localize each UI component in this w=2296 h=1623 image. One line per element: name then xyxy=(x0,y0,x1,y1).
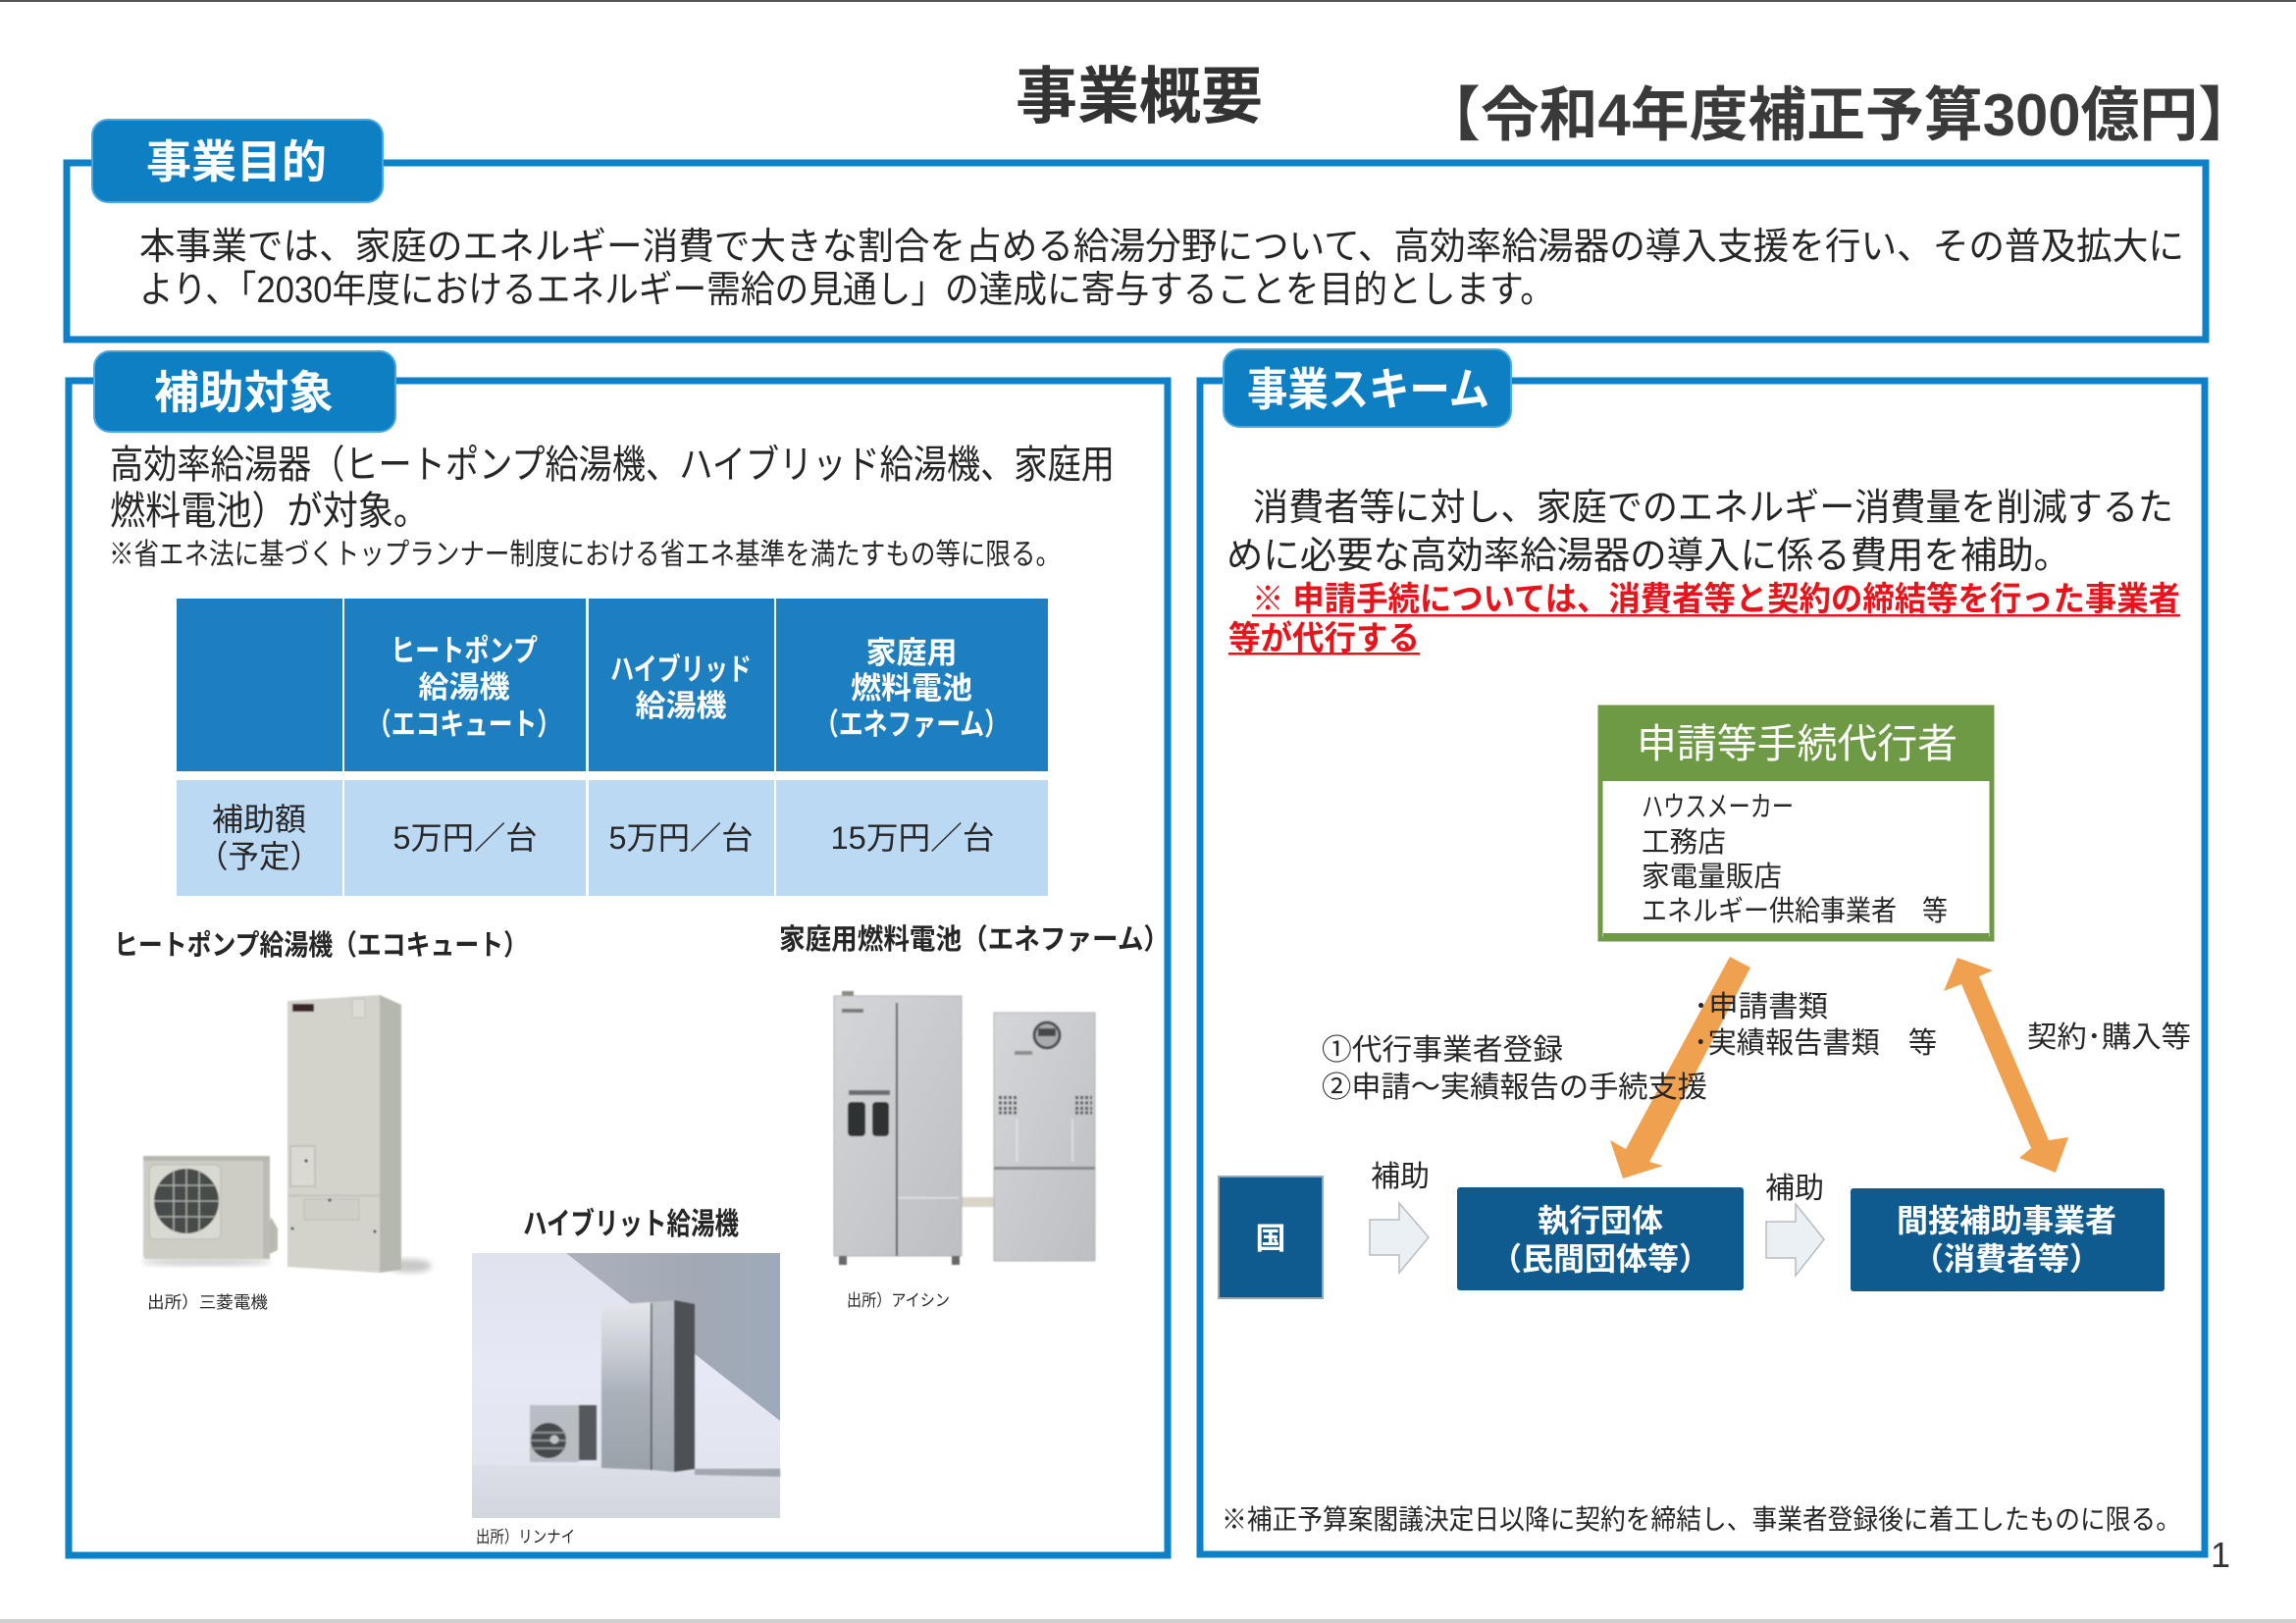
scan edge: bottom xyxy=(0,1619,2296,1623)
scheme text xyxy=(1226,488,2173,577)
panel: subsidy targets xyxy=(69,351,1170,1555)
hybrid label: ハイブリット給湯機 xyxy=(523,1207,739,1241)
subsidy label 2: 補助 xyxy=(1765,1173,1824,1205)
purpose text: 本事業では、家庭のエネルギー消費で大きな割合を占める給湯分野について、高効率給湯器の導入支援を行い、その普及拡大に xyxy=(139,227,2184,268)
table value row: 補助額 xyxy=(212,802,306,837)
box: executing body: （民間団体等） xyxy=(1490,1241,1710,1277)
caption: Aisin: 出所）アイシン xyxy=(847,1291,950,1310)
table header row: 家庭用 xyxy=(865,636,958,670)
box: indirect subsidy recipient xyxy=(1851,1188,2165,1291)
table header row: （エコキュート） xyxy=(367,707,561,742)
red note xyxy=(1228,581,2180,657)
box: indirect subsidy recipient: 間接補助事業者 xyxy=(1897,1203,2116,1238)
agent steps labels: ①代行事業者登録 xyxy=(1322,1034,1563,1067)
caption: Rinnai: 出所）リンナイ xyxy=(476,1528,575,1546)
application documents labels: ･実績報告書類 等 xyxy=(1694,1027,1937,1060)
scan edge: top xyxy=(0,0,2296,2)
agent box xyxy=(1598,706,1994,940)
red note: ※ 申請手続については、消費者等と契約の締結等を行った事業者 xyxy=(1252,581,2180,618)
photo: Rinnai hybrid water heater xyxy=(472,1253,780,1518)
arrow: agent to executing body xyxy=(1610,957,1750,1178)
agent box: 家電量販店 xyxy=(1642,861,1782,893)
box: executing body: 執行団体 xyxy=(1538,1203,1663,1238)
agent steps labels: ②申請～実績報告の手続支援 xyxy=(1322,1072,1707,1104)
photo: EcoCute heat pump water heater xyxy=(141,995,432,1273)
application documents labels xyxy=(1694,991,1937,1060)
contract label: 契約･購入等 xyxy=(2027,1021,2191,1054)
targets text: ※省エネ法に基づくトップランナー制度における省エネ基準を満たすもの等に限る。 xyxy=(109,539,1061,571)
table header row: （エネファーム） xyxy=(814,707,1009,742)
table header row: 給湯機 xyxy=(418,670,510,705)
arrow: subsidy 2 xyxy=(1766,1204,1824,1276)
photo: Aisin fuel cell unit xyxy=(834,991,1095,1265)
targets text: 燃料電池）が対象。 xyxy=(110,490,429,533)
panel: purpose xyxy=(67,120,2206,340)
scheme tab: 事業スキーム xyxy=(1247,364,1489,415)
subsidy table xyxy=(177,599,1048,896)
table header row: 給湯機 xyxy=(636,689,726,723)
targets tab: 補助対象 xyxy=(154,367,334,418)
footnote: ※補正予算案閣議決定日以降に契約を締結し、事業者登録後に着工したものに限る。 xyxy=(1222,1504,2181,1535)
scheme text: めに必要な高効率給湯器の導入に係る費用を補助。 xyxy=(1226,536,2070,577)
table header row: ヒートポンプ xyxy=(391,634,538,668)
agent box: エネルギー供給事業者 等 xyxy=(1642,895,1948,927)
arrow: subsidy 1 xyxy=(1370,1203,1429,1273)
table value row: （予定） xyxy=(197,839,321,874)
table value row: 15万円／台 xyxy=(830,820,995,856)
targets text: 高効率給湯器（ヒートポンプ給湯機、ハイブリッド給湯機、家庭用 xyxy=(110,444,1115,487)
box: executing body xyxy=(1457,1187,1744,1290)
page number: 1 xyxy=(2211,1535,2230,1575)
scheme tab xyxy=(1224,349,1511,427)
table value row: 5万円／台 xyxy=(608,820,754,856)
agent box: 申請等手続代行者 xyxy=(1637,721,1957,766)
purpose tab xyxy=(92,120,383,202)
scheme text: 消費者等に対し、家庭でのエネルギー消費量を削減するた xyxy=(1253,488,2173,529)
subsidy label 1: 補助 xyxy=(1371,1161,1430,1193)
box: indirect subsidy recipient: （消費者等） xyxy=(1912,1241,2101,1277)
table value row xyxy=(177,780,1048,896)
purpose text xyxy=(139,227,2184,311)
box: national government xyxy=(1219,1177,1323,1298)
purpose tab: 事業目的 xyxy=(146,136,327,187)
box: national government: 国 xyxy=(1256,1222,1285,1256)
heat pump label: ヒートポンプ給湯機（エコキュート） xyxy=(114,929,528,962)
title: 事業概要 xyxy=(1016,63,1263,131)
budget heading: 【令和4年度補正予算300億円】 xyxy=(1422,82,2257,148)
targets tab xyxy=(94,351,395,432)
agent box: 工務店 xyxy=(1642,826,1726,859)
table header row xyxy=(177,599,1048,771)
panel: project scheme xyxy=(1200,349,2205,1554)
agent box: ハウスメーカー xyxy=(1642,792,1794,823)
table value row: 5万円／台 xyxy=(392,820,538,856)
arrow: agent and consumer double-headed xyxy=(1944,958,2068,1173)
caption: Mitsubishi: 出所）三菱電機 xyxy=(147,1293,268,1312)
purpose text: より、「2030年度におけるエネルギー需給の見通し」の達成に寄与することを目的とします。 xyxy=(139,270,1554,311)
table header row: ハイブリッド xyxy=(610,653,752,687)
targets text xyxy=(109,444,1115,571)
red note: 等が代行する xyxy=(1228,619,1420,657)
application documents labels: ･申請書類 xyxy=(1694,991,1828,1023)
agent steps labels xyxy=(1322,1034,1707,1104)
table header row: 燃料電池 xyxy=(851,671,972,706)
fuel cell label: 家庭用燃料電池（エネファーム） xyxy=(779,923,1170,956)
